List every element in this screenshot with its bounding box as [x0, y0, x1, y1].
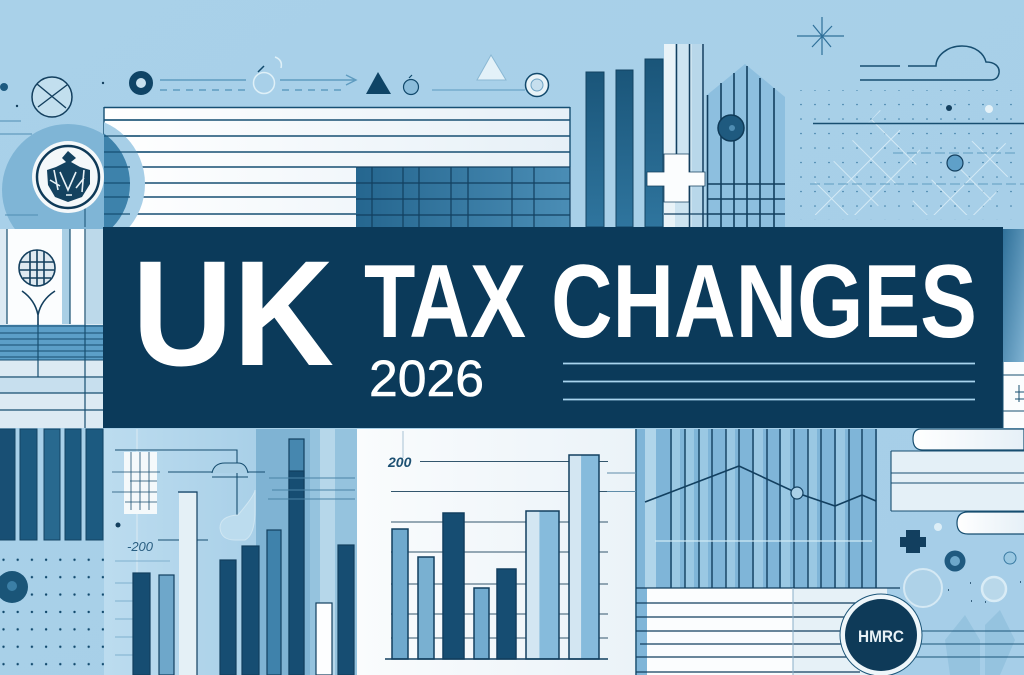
title: TAX CHANGES: TAX	[364, 244, 526, 360]
line series	[645, 466, 876, 506]
data point	[791, 487, 803, 499]
title: TAX CHANGES	[364, 244, 977, 360]
icons: bubbles	[904, 523, 1021, 607]
badge: HMRC: HMRC	[858, 627, 904, 646]
icon: double ring	[526, 74, 548, 96]
arrow: dashed connector	[160, 75, 356, 90]
panel: striped ledger top	[104, 107, 570, 227]
panel: ruled sheet bottom right	[636, 588, 900, 675]
pale tower	[664, 44, 704, 227]
icon: royal crest seal	[32, 141, 104, 213]
icon: globe and stem	[19, 250, 55, 325]
year: 2026	[369, 350, 484, 407]
icon: dark disc	[0, 571, 28, 603]
bars	[133, 439, 354, 675]
panel: left side column	[0, 229, 103, 428]
panel: dark bars bottom left	[0, 429, 103, 540]
icon row: top-left symbols	[0, 55, 548, 134]
banner rules	[563, 364, 975, 400]
panel: right edge strip	[1003, 229, 1024, 428]
axis label: 200	[387, 454, 412, 470]
icon: ring	[132, 74, 150, 92]
dark table grid	[356, 167, 570, 227]
icon: star sparkle	[797, 17, 844, 55]
panel: white bar chart	[357, 429, 636, 675]
panel: right pale blocks	[891, 429, 1024, 534]
panel: dotted lattice	[795, 90, 1024, 220]
bars	[392, 455, 599, 659]
icon: crossed circle	[32, 77, 72, 117]
house tower	[664, 64, 785, 227]
axis label: -200	[127, 539, 154, 554]
icon: white cross	[647, 154, 705, 202]
icon: leaf	[220, 490, 255, 540]
icon: pale triangle	[477, 55, 506, 80]
icon: droplets	[254, 57, 281, 94]
title: UK: UK	[132, 229, 334, 397]
panel: striped line chart	[637, 429, 877, 588]
seal circle backdrop	[2, 119, 160, 229]
banner: title band	[103, 227, 1003, 428]
panel: bar chart left	[104, 429, 357, 675]
icon: dark triangle	[366, 72, 391, 94]
icon: cloud	[860, 46, 999, 80]
icon: mouse dome	[212, 463, 248, 477]
icon: small droplet	[404, 75, 418, 94]
badge: HMRC	[840, 594, 922, 675]
icon: dark plus	[900, 530, 926, 553]
panel: buildings	[586, 44, 785, 227]
chevrons and lines beside badge	[915, 610, 1024, 675]
panel: dot grid	[0, 555, 110, 675]
small table icon	[112, 452, 160, 514]
